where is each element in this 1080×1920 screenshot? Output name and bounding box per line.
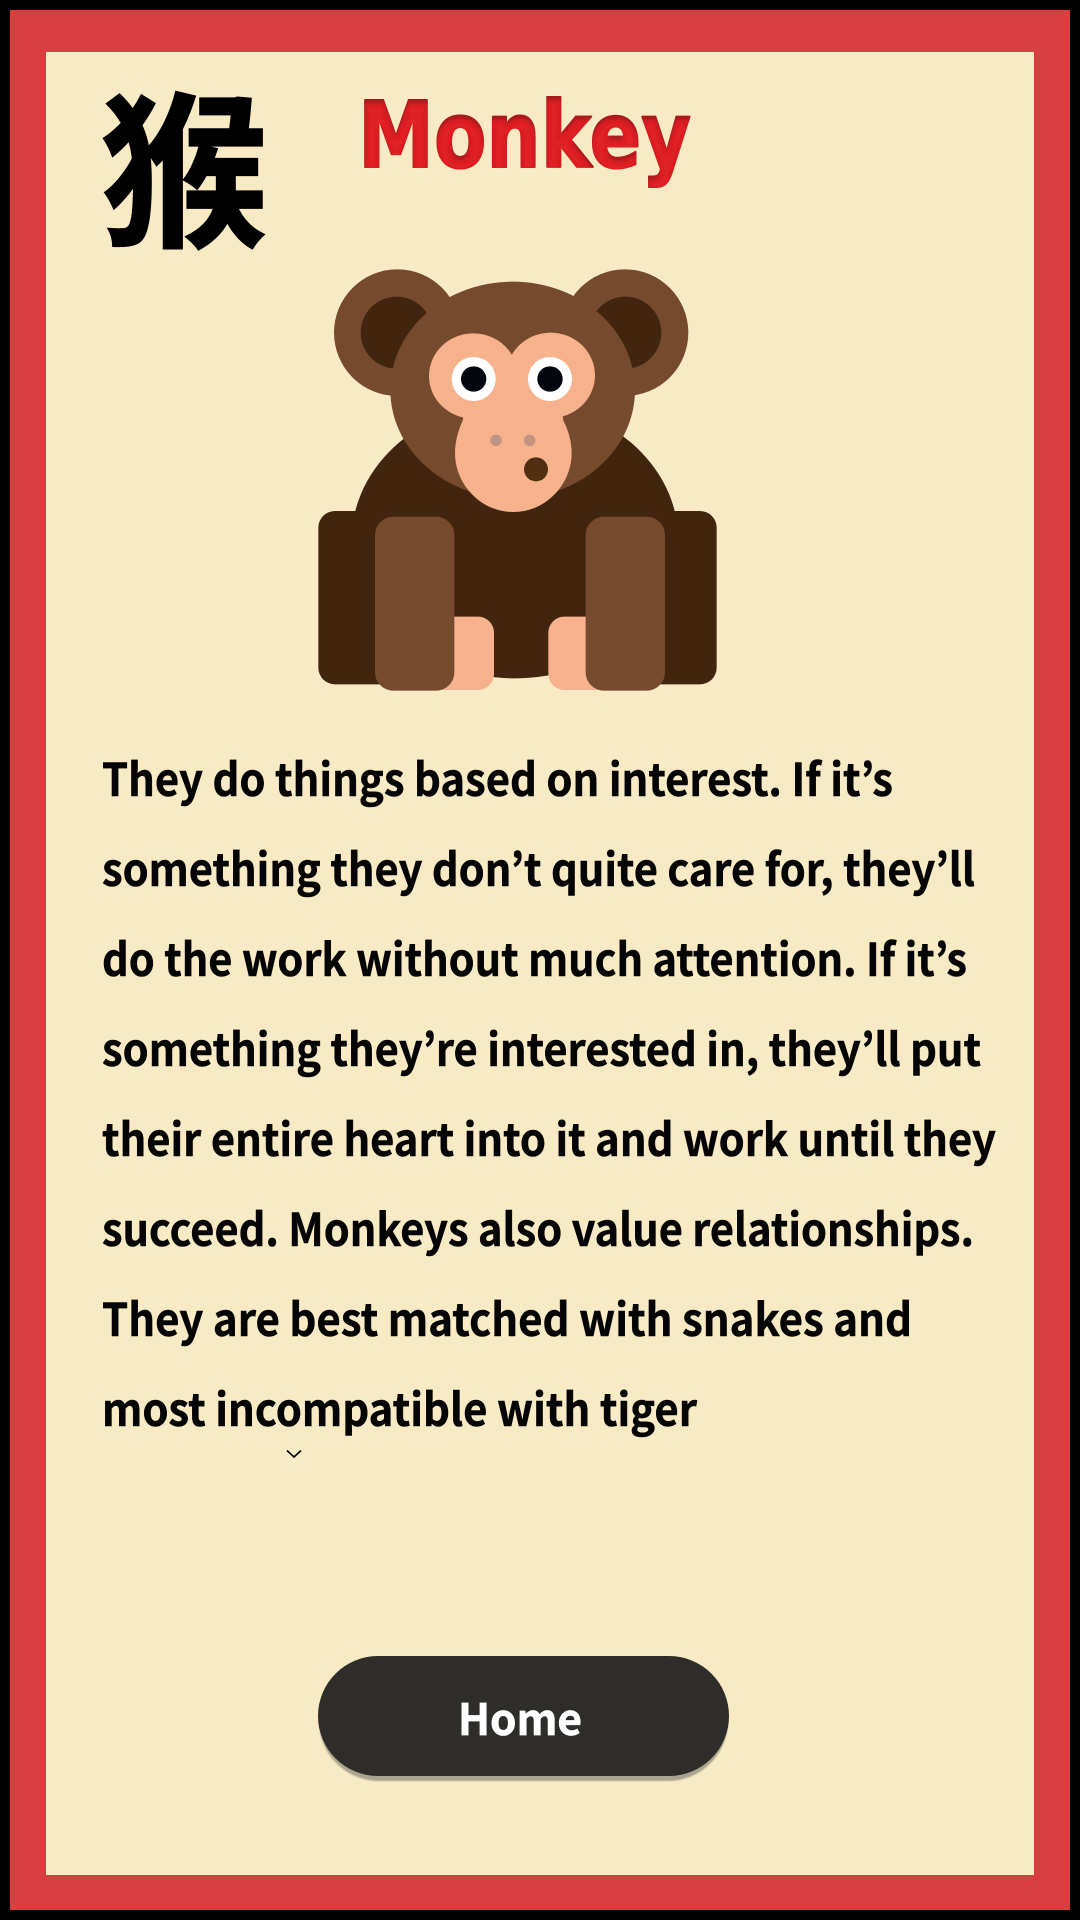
text block: description: succeed. Monkeys also value relationships.: [102, 1194, 974, 1259]
icon: chevron: [287, 1450, 301, 1457]
icon: eyes: [452, 357, 572, 401]
icon: head: [390, 282, 635, 498]
text block: description: [102, 744, 996, 1439]
text block: description: do the work without much attention. If it’s: [102, 924, 967, 989]
icon: body: [318, 402, 717, 684]
icon: ears: [334, 269, 688, 396]
title: Monkey: Monkey: [358, 82, 691, 189]
icon: nostrils: [490, 435, 535, 446]
text block: description: most incompatible with tiger: [102, 1374, 697, 1439]
heading: Chinese character for monkey: 猴: [100, 40, 268, 283]
icon: mouth: [524, 457, 548, 481]
icon: front arms: [375, 517, 665, 691]
text block: description: something they’re interested in, they’ll put: [102, 1014, 981, 1079]
text block: description: something they don’t quite care for, they’ll: [102, 834, 975, 899]
text block: description: They are best matched with snakes and: [102, 1284, 912, 1349]
icon: face: [429, 333, 595, 512]
text block: description: They do things based on interest. If it’s: [102, 744, 893, 809]
button: Home: Home: [458, 1686, 582, 1748]
text block: description: their entire heart into it and work until they: [102, 1104, 996, 1169]
icon: monkey illustration: [318, 269, 717, 691]
button: Home: [318, 1656, 729, 1781]
icon: feet: [427, 617, 616, 690]
